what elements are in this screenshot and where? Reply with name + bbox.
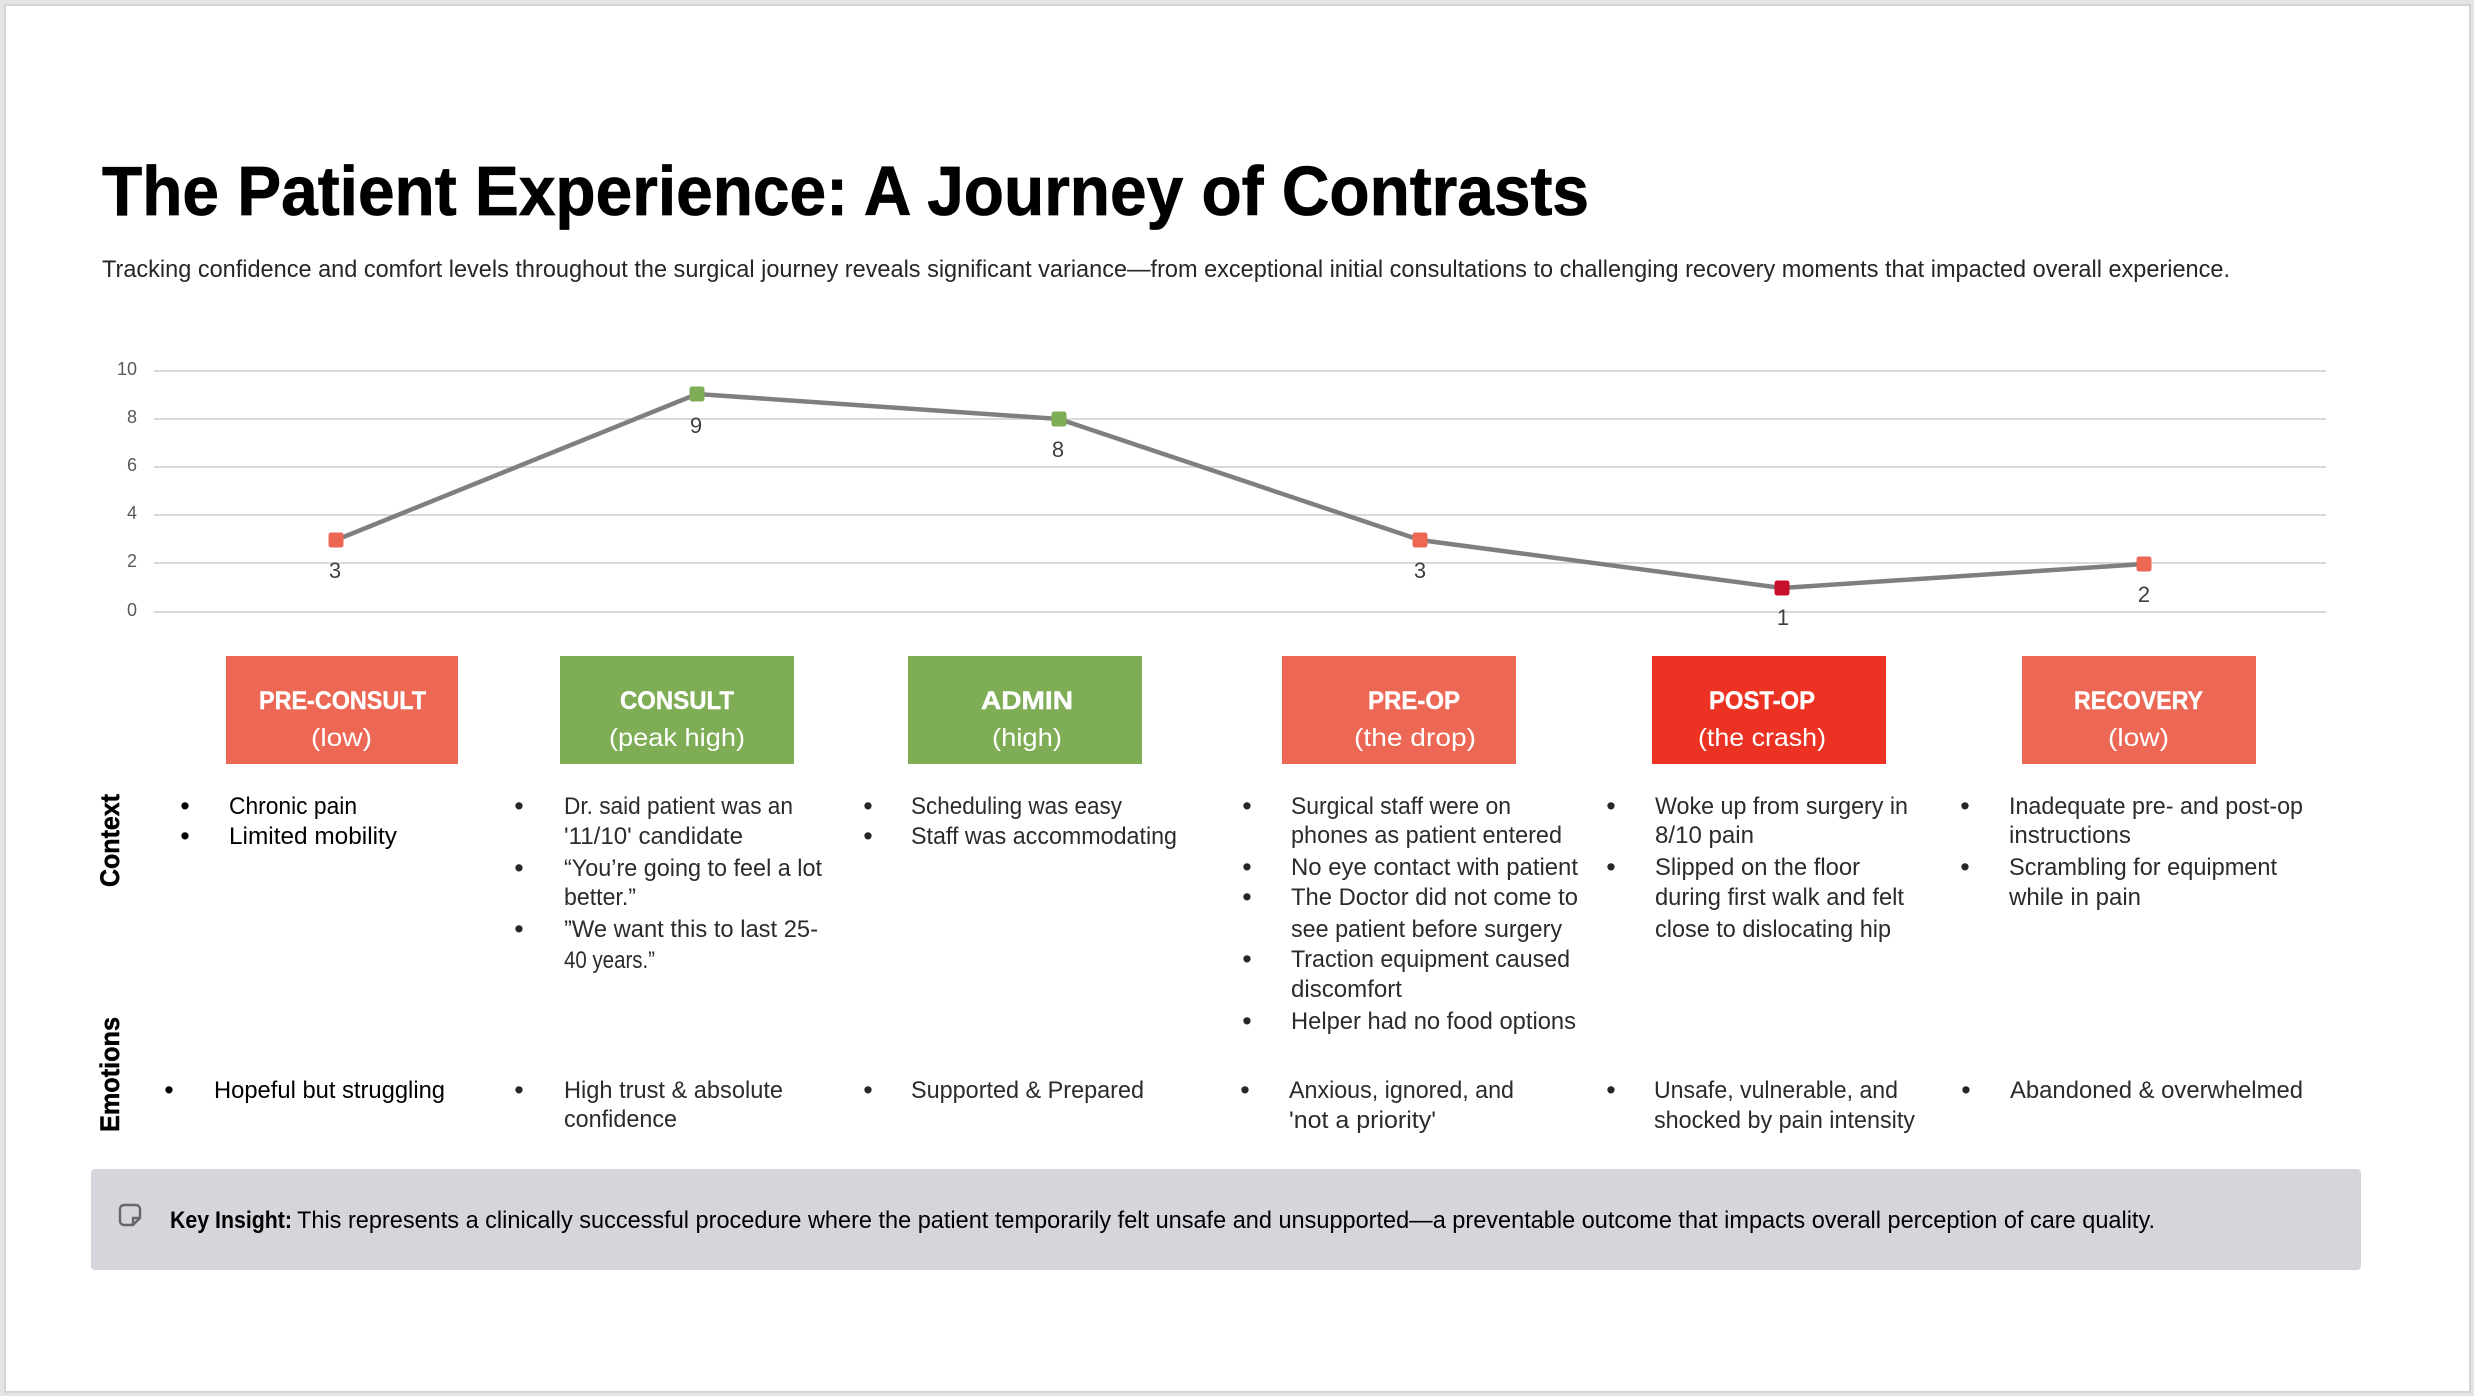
y axis labels [117, 359, 137, 620]
emotions: pre-op [1240, 1075, 1514, 1134]
context: admin: • [863, 791, 873, 821]
emotions: admin: • [863, 1075, 873, 1105]
y axis labels: 2 [127, 551, 137, 571]
stage: pre-consult: (low) [311, 724, 372, 752]
emotions: consult: • [514, 1075, 524, 1105]
emotions: pre-op: • [1240, 1075, 1250, 1105]
emotions: recovery: • [1961, 1075, 1971, 1105]
emotions: pre-op: 'not a priority' [1289, 1107, 1436, 1134]
y axis labels: 0 [127, 600, 137, 620]
stage: admin: ADMIN [981, 687, 1073, 715]
stage: pre-consult [226, 656, 458, 764]
stage: post-op [1652, 656, 1886, 764]
context: post-op: close to dislocating hip [1655, 916, 1891, 943]
context: recovery: instructions [2009, 822, 2131, 849]
context: pre-op: Surgical staff were on [1291, 793, 1511, 820]
context: pre-consult: • [180, 791, 190, 821]
context: pre-op: • [1242, 791, 1252, 821]
context: recovery: • [1960, 791, 1970, 821]
stage: recovery [2022, 656, 2256, 764]
context: pre-consult: Limited mobility [229, 823, 397, 850]
context: pre-consult: • [180, 821, 190, 851]
subtitle: Tracking confidence and comfort levels throughout the surgical journey reveals significant variance—from exceptional initial consultations to challenging recovery moments that impacted overall experience. [102, 256, 2230, 283]
context: pre-op: phones as patient entered [1291, 822, 1562, 849]
context: pre-op: Traction equipment caused [1291, 946, 1570, 973]
context: pre-op: • [1242, 852, 1252, 882]
data value labels [329, 413, 2150, 630]
context: admin: Staff was accommodating [911, 823, 1177, 850]
context: consult: • [514, 791, 524, 821]
y axis labels: 4 [127, 503, 137, 523]
stage: pre-op: PRE-OP [1368, 687, 1460, 715]
stage: recovery: RECOVERY [2074, 687, 2203, 715]
row label: emotions: Emotions [95, 1017, 125, 1132]
callout text: This represents a clinically successful procedure where the patient temporarily felt unsafe and unsupported—a preventable outcome that impacts overall perception of care quality. [297, 1207, 2155, 1234]
y axis labels: 8 [127, 407, 137, 427]
stage: admin [908, 656, 1142, 764]
context: consult: '11/10' candidate [564, 823, 743, 850]
context: pre-op: • [1242, 944, 1252, 974]
title: The Patient Experience: A Journey of Contrasts [102, 152, 1589, 230]
context: consult [514, 791, 822, 974]
context: pre-consult [180, 791, 397, 851]
emotions: admin: Supported & Prepared [911, 1077, 1144, 1104]
context: post-op: • [1606, 852, 1616, 882]
data value labels: 2 [2138, 582, 2150, 607]
data value labels: 1 [1777, 605, 1789, 630]
context: post-op: Slipped on the floor [1655, 854, 1860, 881]
context: recovery: • [1960, 852, 1970, 882]
context: recovery: while in pain [2008, 884, 2141, 911]
emotions: consult: confidence [564, 1106, 677, 1133]
stage: post-op: (the crash) [1698, 724, 1826, 752]
emotions: post-op: shocked by pain intensity [1654, 1107, 1915, 1134]
callout text: Key Insight: [170, 1207, 292, 1234]
stage: admin: (high) [992, 724, 1062, 752]
stage: post-op: POST-OP [1709, 687, 1815, 715]
context: consult: “You’re going to feel a lot [564, 855, 822, 882]
context: post-op: Woke up from surgery in [1655, 793, 1908, 820]
data value labels: 3 [329, 558, 341, 583]
context: consult: • [514, 914, 524, 944]
stage: consult [560, 656, 794, 764]
data markers [328, 386, 2152, 596]
context: pre-op: • [1242, 1006, 1252, 1036]
stage: consult: CONSULT [620, 687, 734, 715]
emotions: pre-op: Anxious, ignored, and [1289, 1077, 1514, 1104]
context: post-op: 8/10 pain [1655, 822, 1754, 849]
context: consult: Dr. said patient was an [564, 793, 793, 820]
line chart: confidence and comfort [117, 359, 2326, 630]
emotions: post-op: • [1606, 1075, 1616, 1105]
context: consult: • [514, 853, 524, 883]
context: pre-op: discomfort [1291, 976, 1402, 1003]
emotions: post-op [1606, 1075, 1915, 1134]
context: consult: ”We want this to last 25- [564, 916, 818, 943]
callout: key insight [91, 1169, 2361, 1270]
emotions: recovery: Abandoned & overwhelmed [2010, 1077, 2303, 1104]
context: post-op: during first walk and felt [1655, 884, 1904, 911]
context: pre-op: The Doctor did not come to [1291, 884, 1578, 911]
emotions: pre-consult: • [164, 1075, 174, 1105]
context: pre-op: • [1242, 882, 1252, 912]
stage: consult: (peak high) [609, 724, 745, 752]
context: pre-consult: Chronic pain [229, 793, 357, 820]
context: pre-op [1242, 791, 1578, 1036]
context: recovery [1960, 791, 2303, 911]
stage: recovery: (low) [2108, 724, 2169, 752]
data value labels: 9 [690, 413, 702, 438]
y axis labels: 10 [117, 359, 137, 379]
context: recovery: Inadequate pre- and post-op [2009, 793, 2303, 820]
context: recovery: Scrambling for equipment [2009, 854, 2277, 881]
y axis labels: 6 [127, 455, 137, 475]
context: pre-op: see patient before surgery [1291, 916, 1562, 943]
stage: pre-op: (the drop) [1354, 724, 1476, 752]
context: admin [863, 791, 1177, 851]
stage: pre-consult: PRE-CONSULT [259, 687, 426, 715]
context: pre-op: No eye contact with patient [1291, 854, 1578, 881]
context: consult: better.” [564, 884, 636, 911]
emotions: pre-consult: Hopeful but struggling [214, 1077, 445, 1104]
context: consult: 40 years.” [564, 947, 655, 974]
data value labels: 3 [1414, 558, 1426, 583]
data line [336, 394, 2144, 588]
icon: sticky note [120, 1205, 140, 1225]
context: pre-op: Helper had no food options [1291, 1008, 1576, 1035]
data value labels: 8 [1052, 437, 1064, 462]
context: post-op: • [1606, 791, 1616, 821]
context: post-op [1606, 791, 1908, 943]
row label: context: Context [95, 794, 125, 887]
emotions: post-op: Unsafe, vulnerable, and [1654, 1077, 1898, 1104]
context: admin: Scheduling was easy [911, 793, 1122, 820]
stage: pre-op [1282, 656, 1516, 764]
context: admin: • [863, 821, 873, 851]
emotions: consult: High trust & absolute [564, 1077, 783, 1104]
emotions: consult [514, 1075, 783, 1133]
